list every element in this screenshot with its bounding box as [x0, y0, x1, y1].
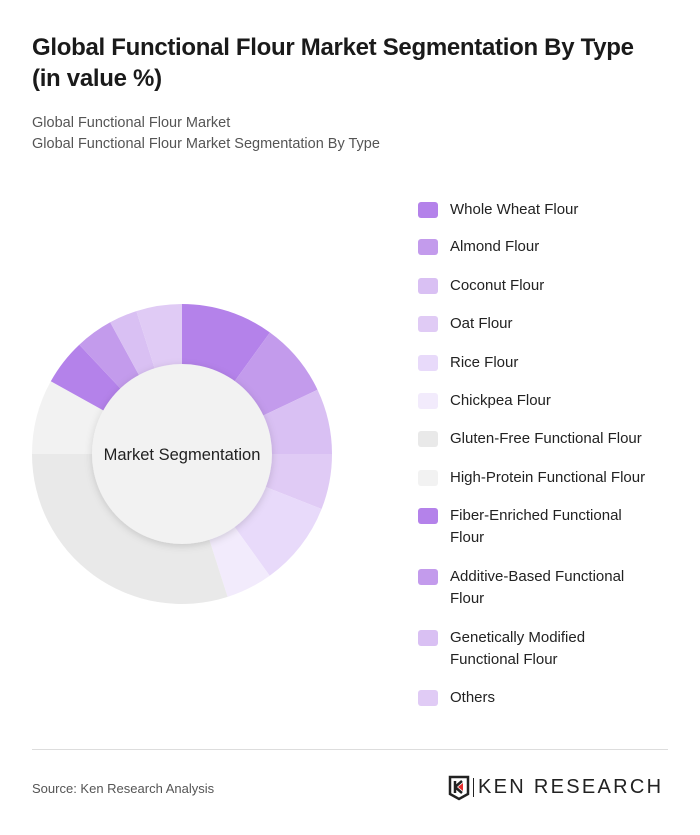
subtitle: Global Functional Flour Market	[32, 115, 230, 131]
text: Genetically Modified Functional Flour	[450, 629, 585, 668]
text: Gluten-Free Functional Flour	[450, 430, 642, 447]
subtitle: Global Functional Flour Market Segmentation By Type	[32, 136, 380, 152]
text: Almond Flour	[450, 238, 539, 255]
text: Others	[450, 689, 495, 706]
source: Source: Ken Research Analysis	[32, 781, 214, 796]
subtitle	[32, 115, 380, 152]
title: Global Functional Flour Market Segmentation By Type (in value %)	[32, 34, 634, 92]
text: Fiber-Enriched Functional Flour	[450, 507, 622, 546]
text: High-Protein Functional Flour	[450, 469, 645, 486]
text: Rice Flour	[450, 354, 518, 371]
text: Oat Flour	[450, 315, 513, 332]
logo: KEN RESEARCH	[478, 776, 663, 798]
text: Whole Wheat Flour	[450, 201, 578, 218]
text: Additive-Based Functional Flour	[450, 568, 624, 607]
donut chart: Market Segmentation	[104, 446, 260, 464]
legend	[418, 201, 645, 706]
text: Chickpea Flour	[450, 392, 551, 409]
text: Coconut Flour	[450, 277, 544, 294]
donut chart	[32, 304, 332, 604]
